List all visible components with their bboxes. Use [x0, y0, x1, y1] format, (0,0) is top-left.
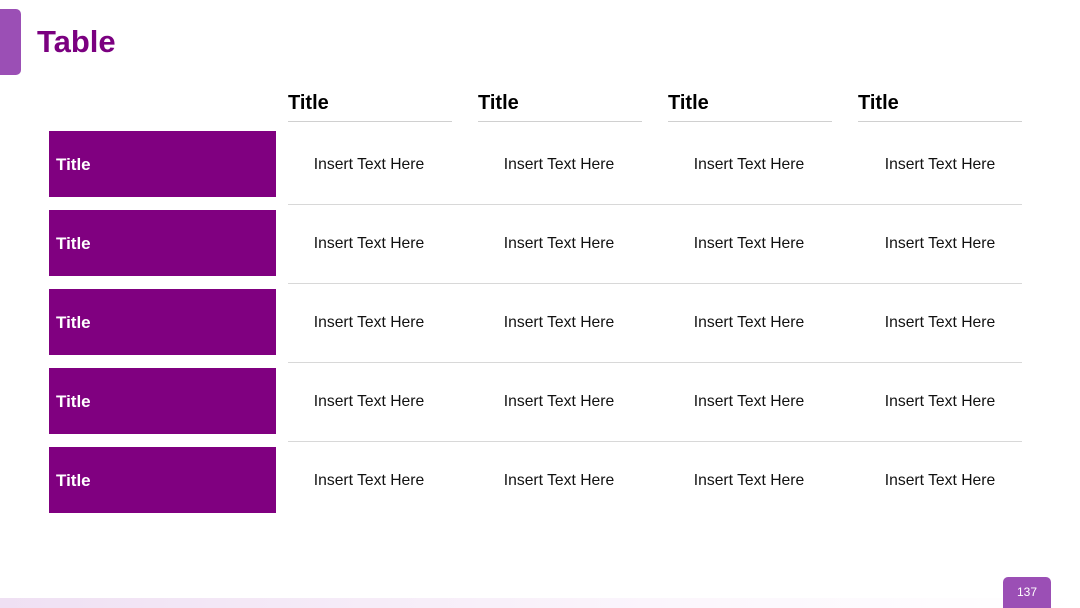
table cells: Insert Text Here [694, 156, 804, 173]
row headers: Title [56, 234, 91, 253]
row headers [49, 131, 276, 513]
table cells: Insert Text Here [885, 156, 995, 173]
table cells: Insert Text Here [885, 314, 995, 331]
table cells: Insert Text Here [504, 472, 614, 489]
page number: 137 [1017, 585, 1037, 599]
table cells: Insert Text Here [314, 314, 424, 331]
accent tab [0, 9, 21, 75]
row headers: Title [56, 313, 91, 332]
title: Table [37, 24, 116, 59]
table cells: Insert Text Here [885, 235, 995, 252]
page number [1003, 577, 1051, 608]
table cells: Insert Text Here [694, 314, 804, 331]
table cells: Insert Text Here [694, 472, 804, 489]
row headers: Title [56, 471, 91, 490]
table cells [314, 156, 995, 489]
column headers: Title [478, 92, 519, 114]
column headers: Title [668, 92, 709, 114]
table cells: Insert Text Here [504, 393, 614, 410]
table cells: Insert Text Here [694, 235, 804, 252]
row headers: Title [56, 392, 91, 411]
table cells: Insert Text Here [314, 156, 424, 173]
table cells: Insert Text Here [694, 393, 804, 410]
table cells: Insert Text Here [504, 235, 614, 252]
table cells: Insert Text Here [314, 235, 424, 252]
table cells: Insert Text Here [885, 472, 995, 489]
table cells: Insert Text Here [504, 314, 614, 331]
column headers [288, 92, 1022, 122]
table cells: Insert Text Here [504, 156, 614, 173]
table cells: Insert Text Here [314, 393, 424, 410]
column headers: Title [858, 92, 899, 114]
table cells: Insert Text Here [885, 393, 995, 410]
row headers: Title [56, 155, 91, 174]
table cells: Insert Text Here [314, 472, 424, 489]
column headers: Title [288, 92, 329, 114]
